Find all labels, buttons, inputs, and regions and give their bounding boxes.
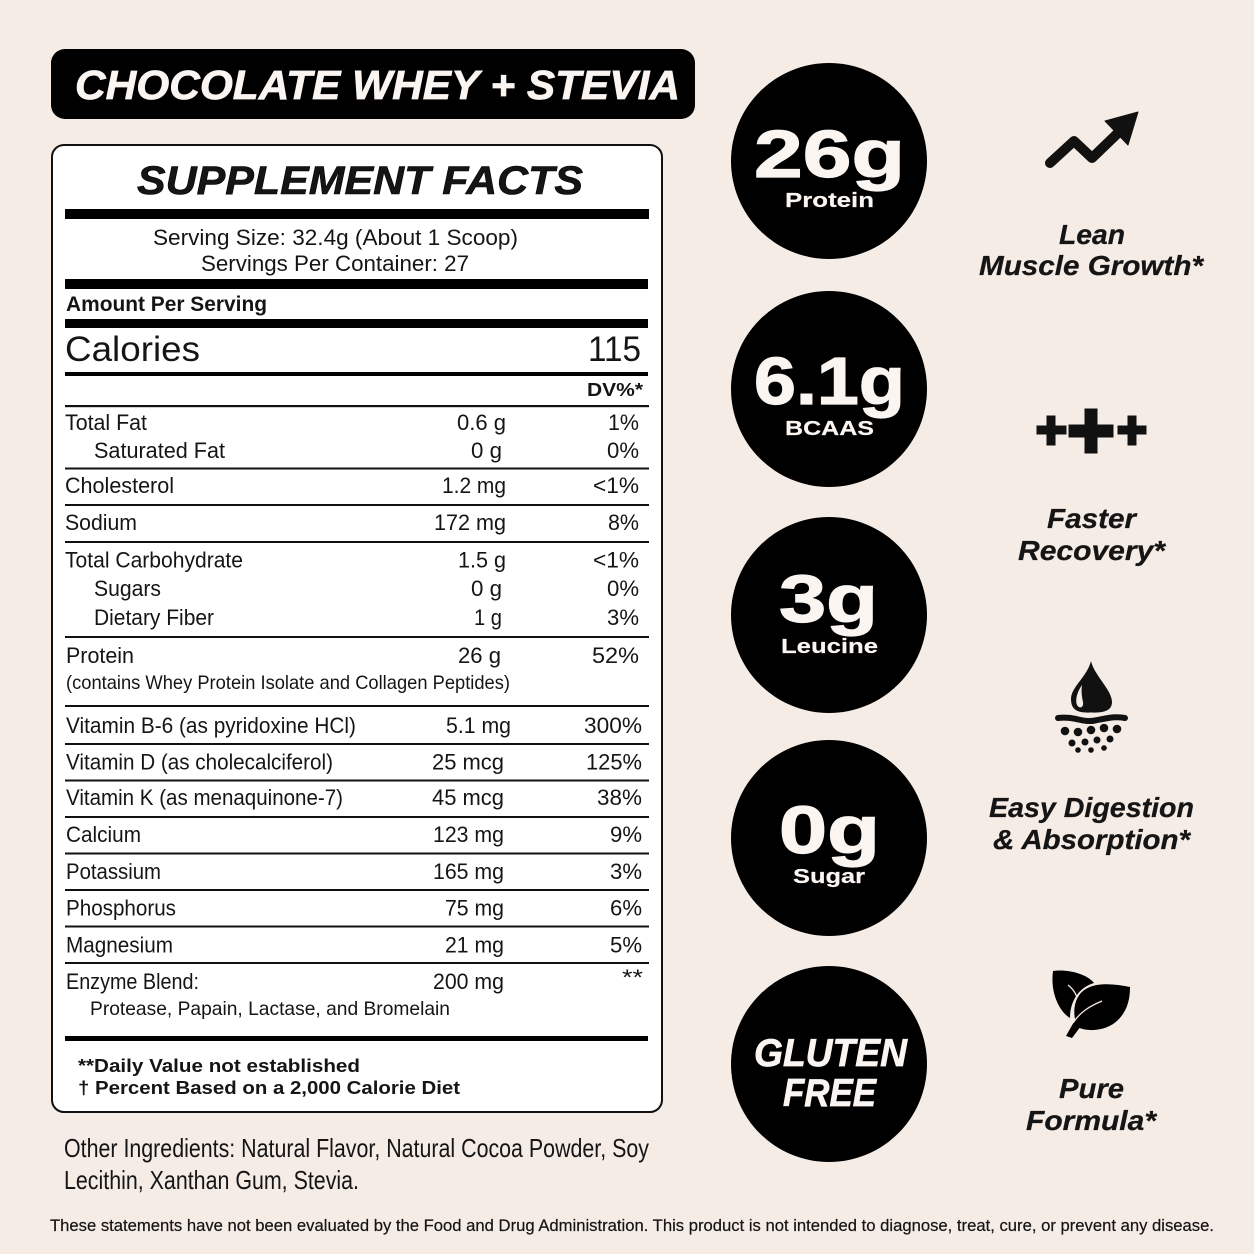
row: sodium: 8% bbox=[608, 510, 639, 535]
row: carbohydrate: Sugars bbox=[94, 576, 161, 601]
row: potassium bbox=[66, 859, 642, 884]
row: phosphorus: 75 mg bbox=[445, 896, 504, 920]
row: vitamin d: 25 mcg bbox=[432, 750, 504, 774]
badge: 26g protein: Protein bbox=[785, 189, 874, 212]
row: vitamin k: Vitamin K (as menaquinone-7) bbox=[66, 785, 343, 810]
row: vitamin b-6 bbox=[66, 713, 642, 738]
badge: 6.1g bcaas bbox=[731, 291, 927, 487]
row: sodium: 172 mg bbox=[434, 510, 506, 535]
row: cholesterol: <1% bbox=[593, 473, 639, 498]
badge: 6.1g bcaas: BCAAS bbox=[785, 417, 874, 440]
label: easy digestion: Easy Digestion bbox=[989, 792, 1194, 823]
other ingredients bbox=[64, 1133, 649, 1195]
calories row: Calories bbox=[65, 330, 200, 369]
label: lean muscle growth bbox=[979, 219, 1204, 281]
footnotes: † Percent Based on a 2,000 Calorie Diet bbox=[78, 1077, 460, 1098]
row: calcium bbox=[66, 822, 642, 847]
amount per serving: Amount Per Serving bbox=[66, 293, 267, 316]
row: calcium: Calcium bbox=[66, 822, 141, 847]
row: protein: 52% bbox=[592, 643, 639, 668]
row: magnesium: Magnesium bbox=[66, 932, 173, 958]
badge: 26g protein: 26g bbox=[754, 117, 905, 192]
row: protein bbox=[66, 643, 639, 694]
serving information: Serving Size: 32.4g (About 1 Scoop) bbox=[153, 225, 518, 250]
row: carbohydrate: 0% bbox=[607, 576, 639, 601]
row: total fat: Saturated Fat bbox=[94, 438, 225, 463]
panel: supplement facts bbox=[52, 145, 662, 1112]
row: enzyme blend: 200 mg bbox=[433, 969, 504, 994]
footnotes bbox=[78, 1055, 460, 1098]
label: faster recovery: Recovery* bbox=[1018, 535, 1166, 566]
row: vitamin k: 45 mcg bbox=[432, 785, 504, 810]
row: carbohydrate: 1.5 g bbox=[458, 548, 506, 572]
calories row bbox=[65, 319, 648, 376]
footnotes: **Daily Value not established bbox=[78, 1055, 360, 1076]
row: potassium: 3% bbox=[610, 859, 642, 884]
label: pure formula: Pure bbox=[1059, 1073, 1124, 1104]
label: lean muscle growth: Muscle Growth* bbox=[979, 250, 1204, 281]
row: vitamin d bbox=[66, 750, 642, 774]
row: vitamin b-6: 5.1 mg bbox=[446, 713, 511, 738]
row: phosphorus: 6% bbox=[610, 896, 642, 920]
badge: 26g protein bbox=[731, 63, 927, 259]
row: enzyme blend: Enzyme Blend: bbox=[66, 969, 199, 994]
row: cholesterol: 1.2 mg bbox=[442, 473, 506, 498]
label: faster recovery: Faster bbox=[1047, 503, 1138, 534]
row: total fat bbox=[65, 410, 639, 463]
badge: gluten free bbox=[731, 966, 927, 1162]
heading: supplement facts: SUPPLEMENT FACTS bbox=[137, 159, 583, 203]
badge: 6.1g bcaas: 6.1g bbox=[754, 344, 905, 419]
title banner: CHOCOLATE WHEY + STEVIA bbox=[75, 62, 680, 108]
row: sodium: Sodium bbox=[65, 510, 137, 535]
row: total fat: 0 g bbox=[471, 438, 502, 463]
row: carbohydrate: Dietary Fiber bbox=[94, 605, 214, 630]
other ingredients: Lecithin, Xanthan Gum, Stevia. bbox=[64, 1165, 359, 1195]
row: carbohydrate: <1% bbox=[593, 548, 639, 572]
badge: 3g leucine: Leucine bbox=[781, 635, 878, 658]
row: calcium: 9% bbox=[610, 822, 642, 847]
label: pure formula bbox=[1026, 1073, 1157, 1136]
serving information: Servings Per Container: 27 bbox=[201, 251, 469, 276]
row: protein: 26 g bbox=[458, 643, 501, 668]
disclaimer: These statements have not been evaluated by the Food and Drug Administration. This product is not intended to diagnose, treat, cure, or prevent any disease. bbox=[50, 1217, 1214, 1235]
row: carbohydrate: 0 g bbox=[471, 576, 502, 601]
calories row: 115 bbox=[588, 330, 641, 369]
row: carbohydrate: 3% bbox=[607, 605, 639, 630]
daily value header: DV%* bbox=[587, 380, 643, 400]
row: enzyme blend: Protease, Papain, Lactase, and Bromelain bbox=[90, 998, 450, 1020]
row: total fat: Total Fat bbox=[65, 410, 147, 435]
label: lean muscle growth: Lean bbox=[1059, 219, 1125, 250]
row: vitamin d: 125% bbox=[586, 750, 642, 774]
row: potassium: 165 mg bbox=[433, 859, 504, 884]
row: sodium bbox=[65, 510, 639, 535]
row: vitamin b-6: 300% bbox=[584, 713, 642, 738]
row: vitamin k: 38% bbox=[597, 785, 642, 810]
label: faster recovery bbox=[1018, 503, 1166, 566]
row: total fat: 0.6 g bbox=[457, 410, 506, 435]
serving information bbox=[65, 209, 649, 289]
label: easy digestion bbox=[989, 792, 1194, 855]
row: total fat: 0% bbox=[607, 438, 639, 463]
badge: 0g sugar: 0g bbox=[779, 793, 880, 868]
icon: plus signs bbox=[1041, 415, 1142, 447]
row: vitamin k bbox=[66, 785, 642, 810]
other ingredients: Other Ingredients: Natural Flavor, Natural Cocoa Powder, Soy bbox=[64, 1133, 649, 1163]
row: magnesium: 21 mg bbox=[445, 932, 504, 958]
icon: rising arrow bbox=[1050, 112, 1138, 163]
title banner bbox=[51, 49, 695, 119]
label: pure formula: Formula* bbox=[1026, 1105, 1157, 1136]
badge: 0g sugar: Sugar bbox=[793, 865, 865, 888]
row: protein: (contains Whey Protein Isolate and Collagen Peptides) bbox=[66, 672, 510, 694]
row: calcium: 123 mg bbox=[433, 822, 504, 847]
row: protein: Protein bbox=[66, 643, 134, 668]
row: total fat: 1% bbox=[608, 410, 639, 435]
label: easy digestion: & Absorption* bbox=[993, 824, 1191, 855]
badge: gluten free: GLUTEN bbox=[754, 1032, 908, 1075]
row: phosphorus bbox=[66, 896, 642, 920]
badge: 3g leucine: 3g bbox=[779, 562, 878, 637]
row: magnesium bbox=[66, 932, 642, 958]
row: vitamin d: Vitamin D (as cholecalciferol) bbox=[66, 750, 333, 774]
badge: gluten free: FREE bbox=[783, 1072, 877, 1115]
icon: leaves bbox=[1052, 971, 1130, 1038]
row: cholesterol bbox=[65, 473, 639, 498]
row: potassium: Potassium bbox=[66, 859, 161, 884]
row: carbohydrate: 1 g bbox=[474, 605, 502, 630]
row: carbohydrate: Total Carbohydrate bbox=[65, 548, 243, 572]
row: cholesterol: Cholesterol bbox=[65, 473, 174, 498]
icon: water drop absorption bbox=[1058, 661, 1125, 753]
row: enzyme blend: ** bbox=[622, 965, 644, 990]
row: carbohydrate bbox=[65, 548, 639, 630]
row: vitamin b-6: Vitamin B-6 (as pyridoxine HCl) bbox=[66, 713, 356, 738]
row: enzyme blend bbox=[66, 965, 644, 1020]
badge: 3g leucine bbox=[731, 517, 927, 713]
row: magnesium: 5% bbox=[610, 932, 642, 958]
badge: 0g sugar bbox=[731, 740, 927, 936]
row: phosphorus: Phosphorus bbox=[66, 896, 176, 920]
